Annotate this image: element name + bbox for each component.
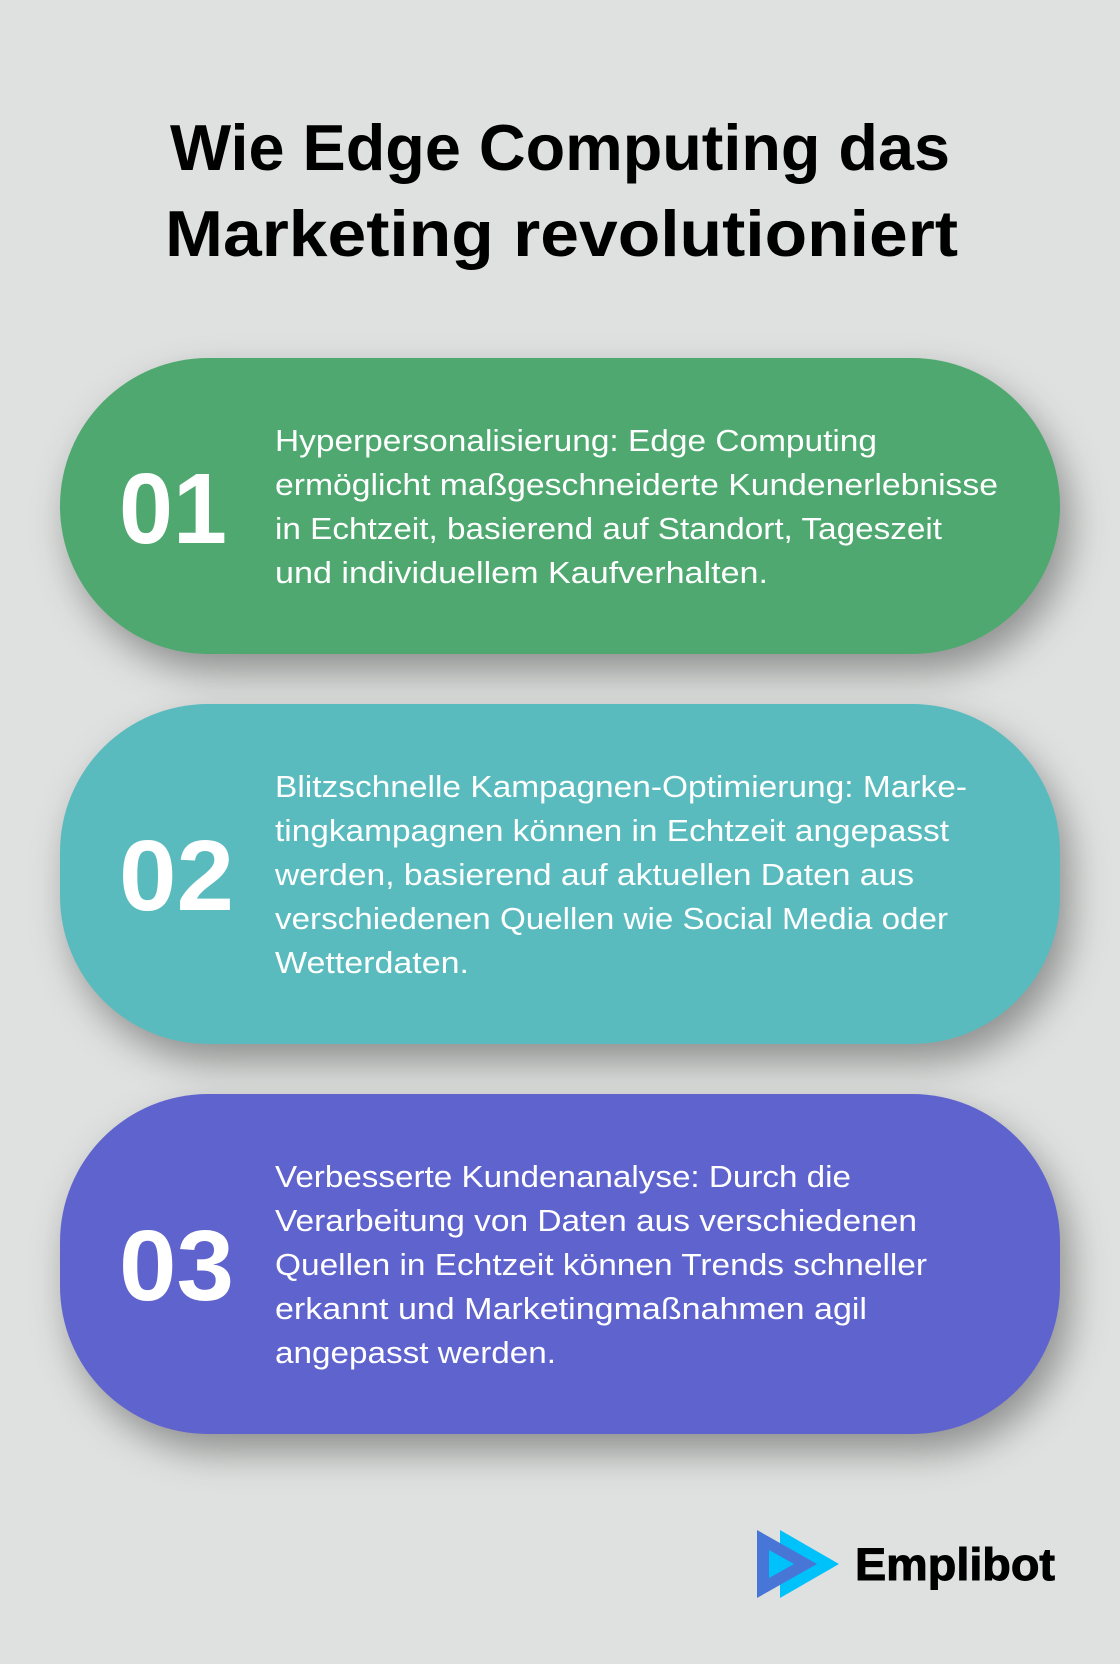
text block: step 02: Wetterdaten. xyxy=(275,946,469,980)
text block: step 03 xyxy=(275,1160,927,1370)
text block: step 02: tingkampagnen können in Echtzeit angepasst xyxy=(275,814,950,848)
text block: step 02: werden, basierend auf aktuellen Daten aus xyxy=(274,858,914,892)
text block: step 03: Verarbeitung von Daten aus verschiedenen xyxy=(275,1204,917,1238)
pill: green background xyxy=(60,358,1060,654)
panel: step 03 xyxy=(60,1094,1070,1452)
logo: Emplibot xyxy=(757,1530,1055,1598)
text block: step 01: Hyperpersonalisierung: Edge Computing xyxy=(275,424,877,458)
number 03: 03 xyxy=(119,1210,234,1322)
panel: step 02 xyxy=(60,704,1070,1062)
text block: step 02 xyxy=(274,770,967,980)
number 02: 02 xyxy=(119,820,234,932)
text block: step 02: Blitzschnelle Kampagnen-Optimierung: Marke- xyxy=(275,770,967,804)
wordmark: Emplibot xyxy=(855,1539,1055,1590)
pill: teal background xyxy=(60,704,1060,1044)
text block: step 03: Verbesserte Kundenanalyse: Durch die xyxy=(275,1160,851,1194)
number 01: 01 xyxy=(119,453,227,565)
title xyxy=(165,111,958,270)
text block: step 03: angepasst werden. xyxy=(275,1336,556,1370)
text block: step 01 xyxy=(275,424,998,590)
text block: step 03: erkannt und Marketingmaßnahmen agil xyxy=(275,1292,867,1326)
text block: step 01: und individuellem Kaufverhalten. xyxy=(275,556,768,590)
text block: step 01: ermöglicht maßgeschneiderte Kundenerlebnisse xyxy=(275,468,998,502)
panel: step 01 xyxy=(60,358,1070,672)
text block: step 03: Quellen in Echtzeit können Trends schneller xyxy=(275,1248,927,1282)
text block: step 01: in Echtzeit, basierend auf Standort, Tageszeit xyxy=(275,512,943,546)
icon: play triangles xyxy=(757,1530,839,1598)
text block: step 02: verschiedenen Quellen wie Social Media oder xyxy=(275,902,948,936)
title: Marketing revolutioniert xyxy=(165,197,958,270)
pill: purple background xyxy=(60,1094,1060,1434)
title: Wie Edge Computing das xyxy=(170,111,950,184)
